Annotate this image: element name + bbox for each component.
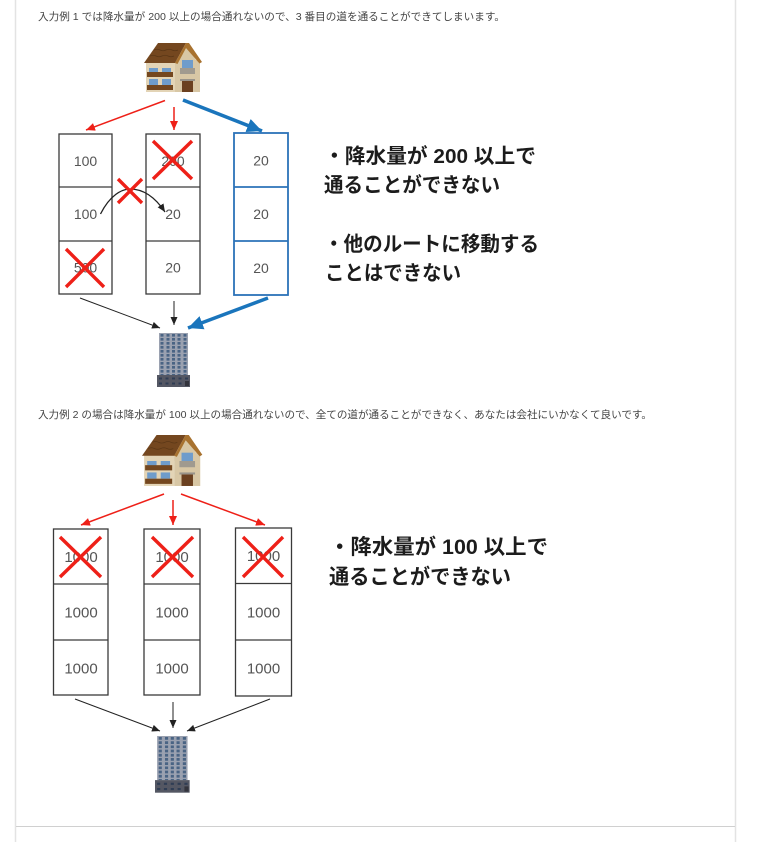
route 3 cells (blue, passable): 20 xyxy=(253,206,269,222)
text block: example 1 notes: ・他のルートに移動する xyxy=(324,233,539,256)
icon: house xyxy=(142,435,202,486)
text block: example 2 notes: 通ることができない xyxy=(329,565,511,589)
panel: example 2 diagram xyxy=(54,435,292,793)
red cross on 200 xyxy=(153,141,192,179)
route 1 cells xyxy=(54,529,108,695)
route 1 cells: 500 xyxy=(74,260,97,276)
route 1 cells: 100 xyxy=(74,206,97,222)
route 1 cells: 1000 xyxy=(64,604,98,622)
route 2 cells: 20 xyxy=(165,206,181,222)
route 3 cells: 1000 xyxy=(247,604,280,622)
blue arrow to office xyxy=(188,298,268,328)
route 2 cells: 200 xyxy=(161,153,185,169)
route 2 cells: 1000 xyxy=(155,604,189,622)
route 3 cells (blue, passable): 20 xyxy=(253,152,269,168)
route 2 cells xyxy=(144,529,200,695)
caption: example 1: 入力例 1 では降水量が 200 以上の場合通れないので、3 番目の道を通ることができてしまいます。 xyxy=(38,10,505,23)
text block: example 1 notes: 通ることができない xyxy=(324,173,500,197)
icon: house xyxy=(144,43,202,92)
red cross on route change xyxy=(118,179,142,203)
icon: office building xyxy=(157,333,190,387)
blue arrow from house to route 3 xyxy=(183,100,262,131)
route 3 cells: 1000 xyxy=(247,548,280,565)
route 1 cells: 1000 xyxy=(64,660,98,678)
curved arrow: moving between routes xyxy=(100,189,165,214)
route 3 cells: 1000 xyxy=(247,660,280,678)
black arrows to office xyxy=(80,298,174,328)
route 3 cells (blue, passable) xyxy=(234,133,288,295)
panel: example 1 diagram xyxy=(59,43,288,387)
red cross on 500 xyxy=(66,249,104,287)
route 1 cells: 1000 xyxy=(64,549,98,566)
route 1 cells xyxy=(59,134,112,294)
route 2 cells: 20 xyxy=(165,260,181,276)
route 2 cells: 1000 xyxy=(155,549,189,566)
route 3 cells (blue, passable): 20 xyxy=(253,260,269,276)
caption: example 2: 入力例 2 の場合は降水量が 100 以上の場合通れないので、全ての道が通ることができなく、あなたは会社にいかなくて良いです。 xyxy=(38,408,652,421)
route 2 cells xyxy=(146,134,200,294)
text block: example 1 notes xyxy=(324,144,539,285)
text block: example 2 notes xyxy=(329,535,548,589)
route 3 cells xyxy=(236,528,292,696)
red crosses on first cells xyxy=(60,537,283,577)
black arrows to office xyxy=(75,699,270,731)
text block: example 2 notes: ・降水量が 100 以上で xyxy=(329,535,548,559)
text block: example 1 notes: ことはできない xyxy=(325,262,461,285)
route 2 cells: 1000 xyxy=(155,660,189,678)
red arrows from house to all routes xyxy=(81,494,265,525)
red arrows from house to routes 1 and 2 xyxy=(86,100,174,130)
route 1 cells: 100 xyxy=(74,153,97,169)
icon: office building xyxy=(155,736,190,793)
text block: example 1 notes: ・降水量が 200 以上で xyxy=(324,144,536,168)
